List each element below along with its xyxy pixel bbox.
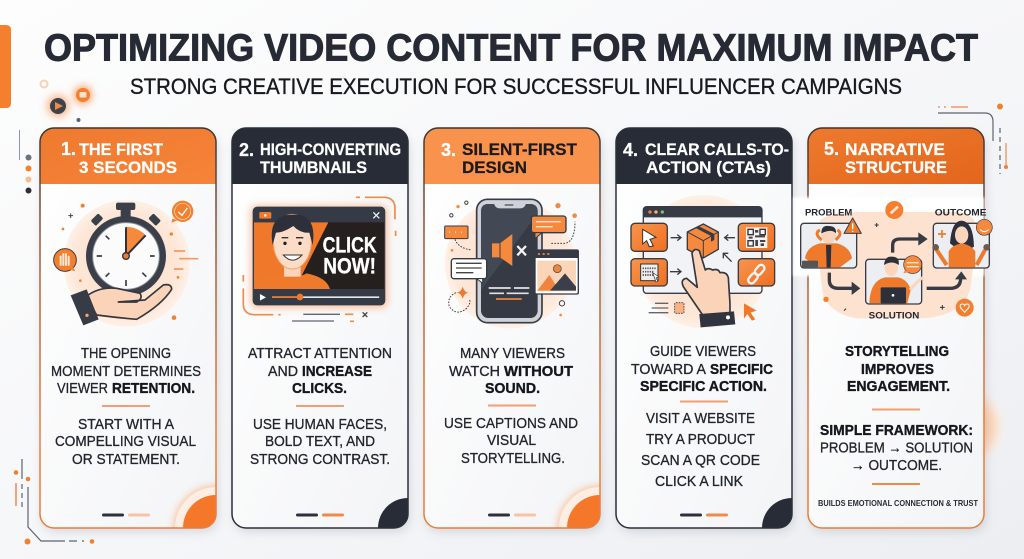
label: outcome: OUTCOME	[935, 208, 986, 218]
text: card 5 body: IMPROVES	[861, 362, 934, 378]
text: card 3 body: WITHOUT	[504, 364, 573, 380]
text: card 4 body: SPECIFIC ACTION.	[640, 379, 767, 395]
heading: card 3: 3.	[441, 140, 456, 160]
heading: card 4: CLEAR CALLS-TO-	[645, 140, 789, 159]
icon: stopwatch on hand	[54, 200, 198, 327]
text: card 3 body: WATCH	[449, 364, 500, 380]
heading: card 5: NARRATIVE	[845, 140, 945, 159]
text: card 4 body	[631, 344, 773, 490]
text: card 2 body	[248, 346, 392, 468]
panel: 4. clear calls-to-action	[615, 127, 797, 535]
decoration: top-left media icons	[40, 80, 92, 122]
text: card 4 body: GUIDE VIEWERS	[650, 344, 756, 360]
title: OPTIMIZING VIDEO CONTENT FOR MAXIMUM IMPACT	[44, 28, 978, 70]
heading: card 2: HIGH-CONVERTING	[260, 140, 401, 159]
icon: problem solution outcome flow	[793, 197, 992, 320]
text: card 4 body: VISIT A WEBSITE	[646, 411, 755, 427]
heading: card 4: ACTION (CTAs)	[646, 158, 771, 177]
text: card 1 body	[51, 346, 201, 468]
heading: card 5	[824, 139, 947, 177]
panel: 5. narrative structure	[793, 128, 992, 532]
decoration: top-right circuit lines	[938, 104, 1008, 174]
heading: card 2: 2.	[239, 140, 254, 160]
subtitle: STRONG CREATIVE EXECUTION FOR SUCCESSFUL INFLUENCER CAMPAIGNS	[130, 74, 902, 99]
heading: card 5: STRUCTURE	[845, 158, 947, 177]
text: card 5 body: STORYTELLING	[845, 344, 949, 360]
icon: video thumbnail click now: NOW!	[323, 253, 376, 278]
heading: card 3: DESIGN	[462, 158, 527, 177]
pager: card 2	[296, 514, 344, 516]
heading: card 4: 4.	[623, 140, 638, 160]
text: card 2 body: STRONG CONTRAST.	[250, 452, 390, 468]
text: card 3 body: USE CAPTIONS AND	[444, 416, 578, 432]
heading: card 2: THUMBNAILS	[260, 158, 367, 177]
heading: card 1: 1.	[61, 139, 76, 159]
text: card 1 body: THE OPENING	[81, 346, 171, 362]
decoration: bottom-left circuit lines	[14, 459, 94, 544]
text: card 2 body: AND	[268, 364, 298, 380]
text: card 3 body: SOUND.	[485, 381, 540, 397]
panel: 2. high-converting thumbnails	[230, 127, 413, 535]
text: card 5 body: → OUTCOME.	[851, 458, 942, 474]
text: card 5 body: BUILDS EMOTIONAL CONNECTION & TRUST	[818, 498, 979, 508]
heading: card 1: 3 SECONDS	[79, 158, 177, 177]
heading: card 1: THE FIRST	[79, 140, 164, 159]
text: card 5 body: SIMPLE FRAMEWORK:	[820, 423, 973, 439]
heading: card 4	[623, 140, 789, 177]
text: card 1 body: MOMENT DETERMINES	[51, 364, 201, 380]
heading: card 3	[441, 140, 578, 177]
heading: card 3: SILENT-FIRST	[462, 140, 578, 159]
text: card 3 body	[444, 346, 578, 467]
text: card 3 body: MANY VIEWERS	[460, 346, 565, 362]
label: solution: SOLUTION	[869, 310, 920, 320]
text: card 4 body: TOWARD A	[631, 362, 706, 378]
text: card 2 body: BOLD TEXT, AND	[265, 434, 375, 450]
text: card 5 body: ENGAGEMENT.	[847, 379, 950, 395]
text: card 5 body: PROBLEM → SOLUTION	[820, 440, 973, 456]
text: card 4 body: SPECIFIC	[710, 362, 773, 378]
decoration: left orange tab	[0, 25, 11, 108]
heading: card 5: 5.	[824, 139, 839, 159]
decoration: left side line and dots	[19, 130, 32, 194]
label: problem: PROBLEM	[805, 208, 853, 218]
text: card 2 body: CLICKS.	[292, 381, 347, 397]
pager: card 3	[488, 514, 536, 516]
icon: video thumbnail click now: CLICK	[323, 233, 377, 258]
text: card 4 body: SCAN A QR CODE	[641, 453, 760, 469]
text: card 4 body: TRY A PRODUCT	[646, 432, 755, 448]
icon: muted phone with captions	[445, 198, 578, 328]
text: card 1 body: VIEWER	[57, 381, 108, 397]
text: card 4 body: CLICK A LINK	[655, 474, 743, 490]
icon: browser with CTA tiles and pointing hand	[631, 195, 775, 328]
pager: card 4	[680, 514, 728, 516]
text: card 1 body: COMPELLING VISUAL	[55, 434, 196, 450]
text: card 1 body: RETENTION.	[112, 381, 195, 397]
text: card 3 body: STORYTELLING.	[461, 451, 565, 467]
panel: 3. silent-first design	[423, 127, 605, 535]
text: card 3 body: VISUAL	[487, 433, 536, 449]
pager: card 1	[102, 514, 150, 516]
heading: card 2	[239, 140, 401, 177]
text: card 1 body: START WITH A	[78, 417, 174, 433]
text: card 5 body	[818, 344, 979, 508]
panel: 1. the first 3 seconds	[38, 127, 222, 535]
decoration: right side glow	[922, 386, 1002, 466]
text: card 2 body: ATTRACT ATTENTION	[248, 346, 392, 362]
text: card 2 body: USE HUMAN FACES,	[253, 417, 387, 433]
text: card 1 body: OR STATEMENT.	[72, 452, 180, 468]
heading: card 1	[61, 139, 177, 177]
text: card 2 body: INCREASE	[302, 364, 372, 380]
icon: video thumbnail click now	[243, 197, 396, 321]
